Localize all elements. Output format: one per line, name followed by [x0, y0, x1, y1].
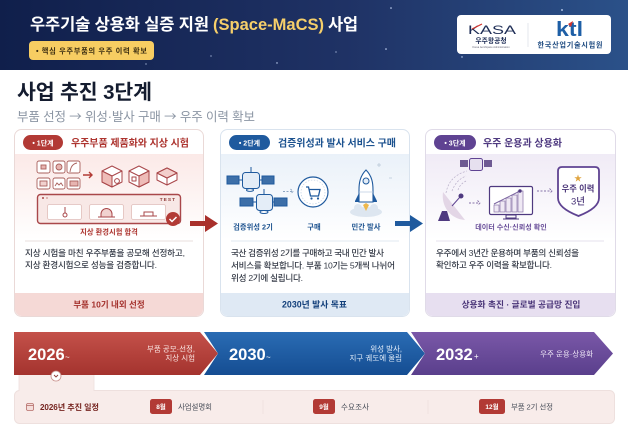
logo: KASA: 우주항공청: [475, 36, 507, 45]
icon: monitor chart: [490, 186, 532, 219]
step badge: [23, 135, 63, 150]
title: (Space-MaCS): [213, 16, 324, 34]
description: 우주에서 3년간 운용하며 부품의 신뢰성을: [436, 247, 579, 258]
test chamber: TEST: [160, 197, 176, 203]
step badge: • 3단계: [444, 138, 466, 148]
footer: 상용화 촉진 · 글로벌 공급망 진입: [462, 298, 580, 310]
footer: 2030년 발사 목표: [282, 298, 347, 310]
header banner: [0, 0, 628, 70]
description: 지상 환경시험으로 성능을 검증합니다.: [25, 259, 157, 270]
logos box: [457, 15, 611, 54]
item: September: 9월: [319, 402, 329, 411]
logo: KASA: [468, 24, 517, 49]
timeline: 2032: 2032: [436, 346, 473, 364]
timeline: 2032: +: [474, 352, 479, 361]
item: September: [313, 399, 369, 414]
item: August: 8월: [156, 402, 166, 411]
title: [30, 15, 358, 34]
icon: dish antenna: [438, 192, 465, 221]
illustration labels: [233, 222, 381, 232]
timeline: 2032: 우주 운용·상용화: [540, 348, 593, 358]
step heading: 우주부품 제품화와 지상 시험: [71, 136, 189, 150]
timeline: 2030: ~: [266, 353, 271, 362]
logo: KASA: Korea AeroSpace Administration: [472, 45, 510, 49]
result label: 지상 환경시험 합격: [80, 228, 138, 236]
arrow: step 1 to 2: [190, 215, 218, 232]
dashed arrow: [469, 200, 480, 206]
description: 확인하고 우주 이력을 확보합니다.: [436, 259, 552, 270]
timeline: 2026: ~: [65, 353, 70, 362]
icon: satellite with signal: [446, 158, 492, 193]
illustration labels: 검증위성 2기: [233, 222, 273, 232]
timeline: 2026: 2026: [28, 346, 65, 364]
description: 서비스를 확보합니다. 부품 10기는 5개씩 나뉘어: [231, 260, 395, 270]
arrow: step 2 to 3: [395, 215, 423, 232]
timeline: 2030: 2030: [229, 346, 266, 364]
icon: component grid: [37, 161, 80, 189]
timeline: 2030: [204, 332, 425, 375]
title: 우주기술 상용화 실증 지원: [30, 15, 209, 34]
item: December: 12월: [485, 402, 499, 411]
logo: KASA: KASA: [468, 25, 517, 37]
step badge: • 1단계: [32, 138, 54, 148]
description: 지상 시험을 마친 우주부품을 공모해 선정하고,: [25, 247, 185, 258]
icon: shield badge: 우주 이력: [562, 184, 594, 194]
icon: two satellites: [227, 167, 287, 214]
timeline: 2030: 위성 발사,: [370, 344, 402, 354]
timeline: 2026: [14, 332, 218, 375]
schedule panel: [14, 371, 614, 424]
item: September: 수요조사: [341, 402, 369, 412]
dashed arrow: [537, 188, 552, 194]
icon: rocket: [350, 163, 392, 217]
icon: shield badge: [558, 167, 599, 216]
icon: three cubes: [102, 166, 177, 187]
step heading: 우주 운용과 상용화: [483, 136, 562, 150]
item: December: [479, 399, 553, 414]
step badge: [434, 135, 476, 150]
tagline pill: [29, 41, 154, 60]
panel: step 1: [14, 130, 204, 316]
panel: step 2: [220, 130, 410, 316]
illustration labels: 구매: [307, 222, 321, 232]
timeline: 2026: 지상 시험: [165, 352, 195, 362]
section subtitle: 부품 선정 → 위성·발사 구매 → 우주 이력 확보: [17, 106, 255, 125]
test chamber: [38, 194, 180, 226]
icon: cart: [298, 177, 328, 207]
arrow: [83, 172, 92, 178]
toggle icon: [51, 371, 61, 381]
title: 사업: [328, 15, 358, 34]
section heading: 사업 추진 3단계: [17, 81, 152, 104]
footer: 부품 10기 내외 선정: [73, 300, 145, 310]
timeline: 2032: [411, 332, 613, 375]
timeline: 2030: 지구 궤도에 올림: [350, 354, 402, 362]
illustration label: 데이터 수신·신뢰성 확인: [475, 222, 547, 232]
description: [436, 247, 579, 270]
description: 국산 검증위성 2기를 구매하고 국내 민간 발사: [231, 247, 384, 258]
item: December: 부품 2기 선정: [511, 402, 553, 412]
step badge: [229, 135, 270, 150]
description: [25, 247, 185, 270]
description: 위성 2기에 실립니다.: [231, 272, 303, 283]
schedule heading: 2026년 추진 일정: [40, 402, 99, 412]
item: August: 사업설명회: [178, 402, 212, 412]
icon: shield badge: ★: [574, 174, 582, 183]
logo: ktl: 한국산업기술시험원: [538, 40, 603, 50]
step heading: 검증위성과 발사 서비스 구매: [278, 136, 396, 150]
tagline pill: • 핵심 우주부품의 우주 이력 확보: [36, 46, 147, 56]
icon: calendar: [26, 404, 34, 410]
logo: ktl: [538, 19, 603, 50]
illustration labels: 민간 발사: [352, 222, 381, 232]
icon: shield badge: 3년: [571, 196, 585, 208]
logo: ktl: ktl: [556, 19, 583, 41]
dashed arrow: [283, 189, 293, 194]
item: August: [150, 399, 212, 414]
timeline: 2026: 부품 공모·선정,: [147, 344, 195, 354]
step badge: • 2단계: [239, 138, 260, 148]
description: [231, 247, 395, 283]
panel: step 3: [426, 130, 616, 316]
